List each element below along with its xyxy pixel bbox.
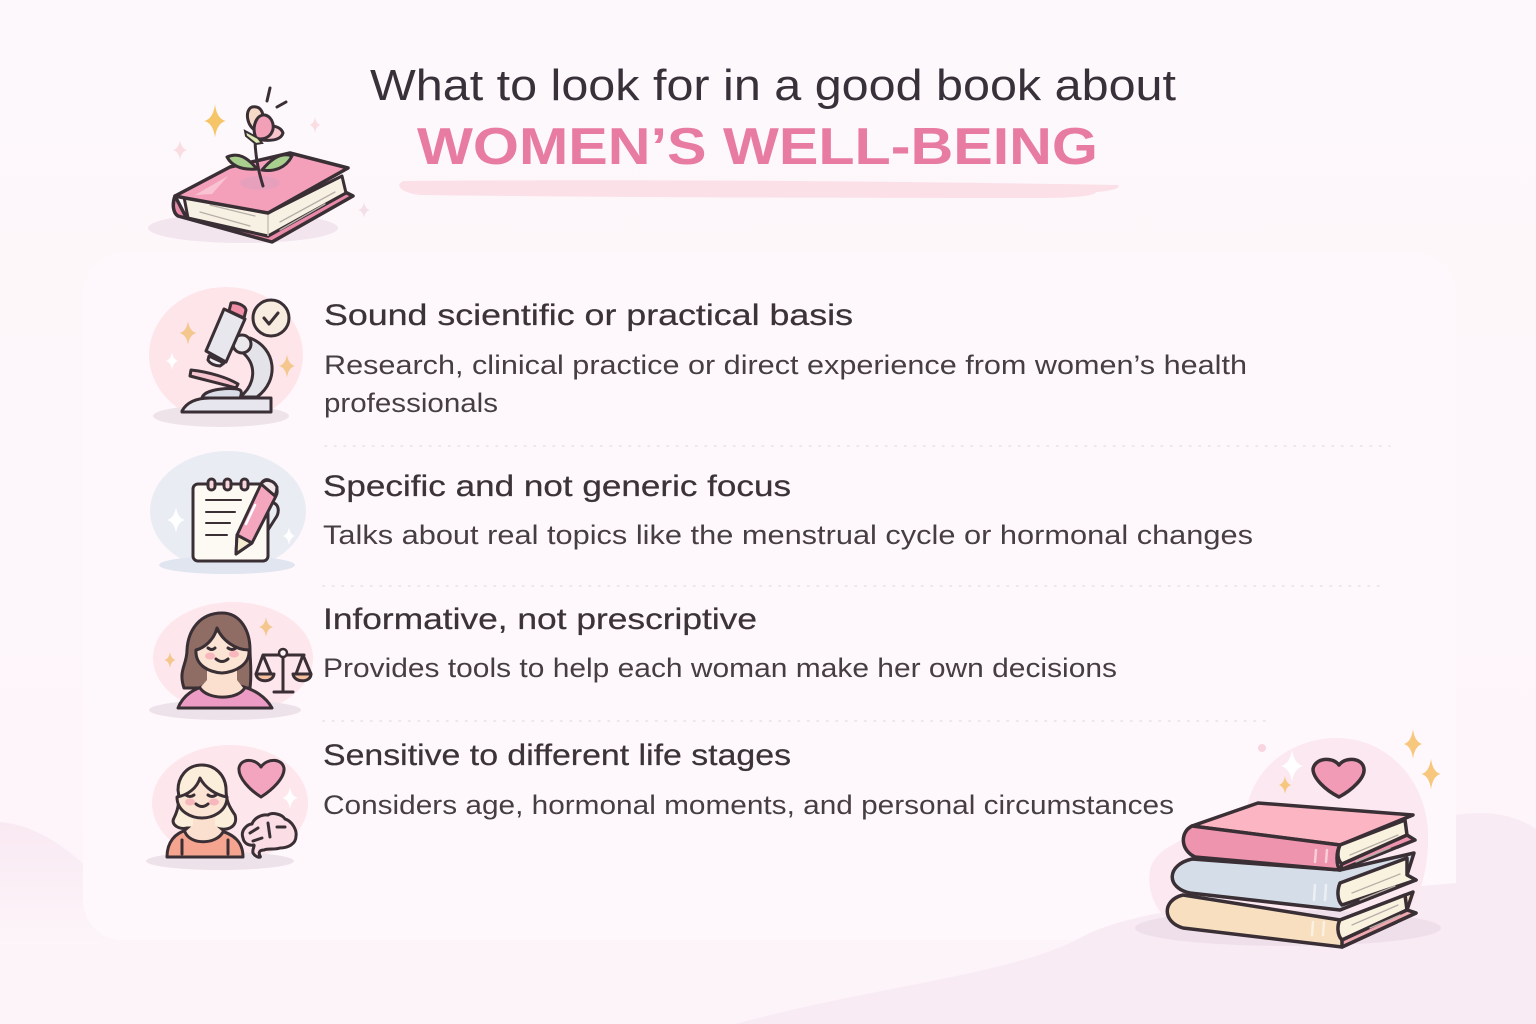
title: What to look for in a good book about	[370, 61, 1176, 110]
item 2: specific and not generic focus	[323, 470, 1253, 550]
item 1: sound scientific or practical basis: professionals	[324, 388, 498, 418]
item 1: sound scientific or practical basis: Sound scientific or practical basis	[324, 299, 853, 332]
icon: woman with heart and brain	[146, 745, 308, 870]
icon: stack of books with heart	[1135, 729, 1441, 947]
panel: criteria card	[83, 253, 1456, 940]
item 4: sensitive to different life stages: Sensitive to different life stages	[323, 739, 791, 772]
item 4: sensitive to different life stages: Considers age, hormonal moments, and personal circumstances	[323, 790, 1174, 820]
cream book	[1167, 892, 1416, 947]
title: WOMEN’S WELL-BEING	[417, 118, 1098, 176]
item 3: informative, not prescriptive	[323, 603, 1117, 683]
item 3: informative, not prescriptive: Provides tools to help each woman make her own decisions	[323, 653, 1117, 683]
item 2: specific and not generic focus: Talks about real topics like the menstrual cycle or hormonal changes	[323, 520, 1253, 550]
item 1: sound scientific or practical basis	[324, 299, 1247, 418]
item 3: informative, not prescriptive: Informative, not prescriptive	[323, 603, 757, 636]
title	[370, 61, 1176, 198]
item 1: sound scientific or practical basis: Research, clinical practice or direct experience from women’s health	[324, 350, 1247, 380]
icon: microscope	[149, 287, 303, 427]
blue book	[1172, 853, 1416, 910]
icon: woman with balance scales	[149, 602, 313, 720]
divider	[323, 720, 1270, 722]
icon: book with flower	[148, 88, 370, 243]
divider	[325, 445, 1390, 447]
icon: notepad and pencil	[150, 451, 306, 574]
pink book	[1192, 803, 1413, 845]
divider	[323, 585, 1385, 587]
item 2: specific and not generic focus: Specific and not generic focus	[323, 470, 791, 503]
item 4: sensitive to different life stages	[323, 739, 1174, 820]
